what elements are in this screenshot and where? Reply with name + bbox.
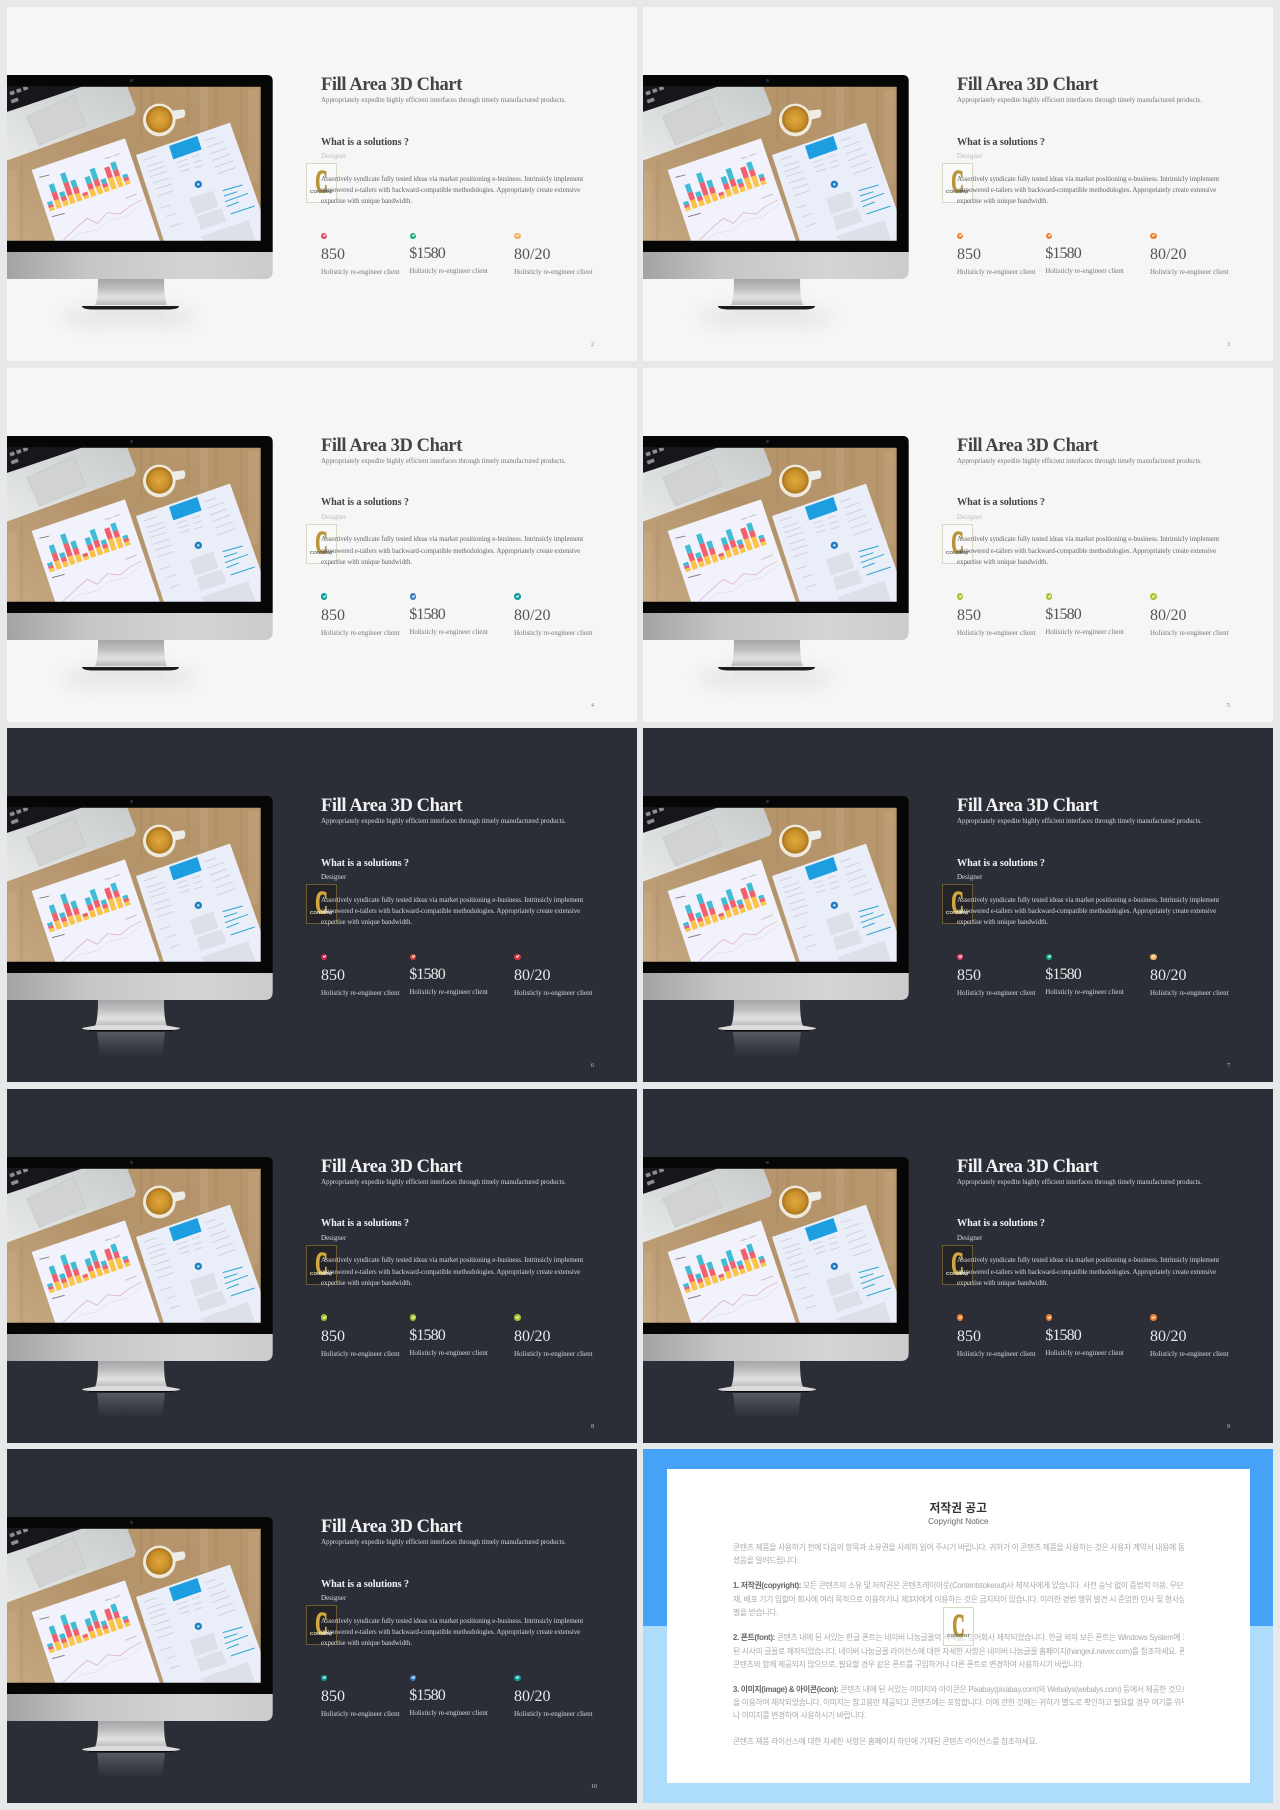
stat number 3: 80/20 xyxy=(514,1328,550,1344)
stat number 2: $1580 xyxy=(1045,966,1081,983)
icon: check 2 xyxy=(410,1314,416,1321)
heading: Fill Area 3D Chart xyxy=(321,1517,462,1537)
icon: check 1 xyxy=(321,954,327,960)
logo watermark xyxy=(306,163,337,203)
page number: 5 xyxy=(1227,702,1230,708)
stat label 1: Holisticly re-engineer client xyxy=(957,628,1036,636)
stat number 2: $1580 xyxy=(1045,606,1081,622)
stat number 3: 80/20 xyxy=(514,246,550,263)
logo watermark: CONTENT xyxy=(310,911,333,916)
monitor illustration xyxy=(643,1157,909,1412)
stat label 3: Holisticly re-engineer client xyxy=(1150,268,1229,276)
monitor illustration xyxy=(7,1517,273,1772)
logo watermark: C xyxy=(951,524,964,560)
logo watermark xyxy=(306,524,337,564)
stat label 1: Holisticly re-engineer client xyxy=(957,1350,1036,1358)
stat label 3: Holisticly re-engineer client xyxy=(514,268,593,276)
logo watermark: CONTENT xyxy=(946,911,969,916)
subtitle: Appropriately expedite highly efficient interfaces through timely manufactured products. xyxy=(321,96,566,104)
panel: slide 2 (light): expertise with unique bandwidth. xyxy=(321,197,412,205)
stat label 2: Holisticly re-engineer client xyxy=(409,1348,488,1356)
icon: check 1 xyxy=(957,954,963,960)
monitor illustration xyxy=(7,1157,273,1412)
role: Designer xyxy=(957,1234,982,1242)
question heading: What is a solutions ? xyxy=(957,136,1045,148)
logo watermark xyxy=(306,1605,337,1645)
role: Designer xyxy=(321,512,346,520)
stat number 1: 850 xyxy=(957,246,981,263)
logo watermark xyxy=(942,884,973,924)
panel: slide 2 (light): empowered e-tailers with backward-compatible methodologies. Appropriately create extensive xyxy=(321,186,580,194)
stat label 1: Holisticly re-engineer client xyxy=(321,989,400,997)
subtitle: Appropriately expedite highly efficient interfaces through timely manufactured products. xyxy=(957,456,1202,464)
panel: slide 5 (light): empowered e-tailers with backward-compatible methodologies. Appropriately create extensive xyxy=(957,546,1216,554)
logo watermark: CONTENT xyxy=(947,1634,970,1638)
stat label 2: Holisticly re-engineer client xyxy=(1045,267,1124,275)
stat number 1: 850 xyxy=(321,967,345,984)
panel: slide 3 (light): Assertively syndicate fully tested ideas via market positioning e-business. Intrinsicly implement xyxy=(957,175,1219,183)
icon: check 3 xyxy=(514,233,521,239)
heading: Fill Area 3D Chart xyxy=(957,1156,1098,1176)
icon: check 1 xyxy=(321,593,327,600)
logo watermark: CONTENT xyxy=(946,550,969,556)
page number: 7 xyxy=(1227,1063,1230,1069)
stat number 2: $1580 xyxy=(1045,245,1081,262)
stat number 3: 80/20 xyxy=(1150,967,1186,984)
panel: slide 9 (dark) xyxy=(643,1088,1273,1442)
stat label 3: Holisticly re-engineer client xyxy=(514,628,593,636)
subtitle: Appropriately expedite highly efficient interfaces through timely manufactured products. xyxy=(957,817,1202,825)
logo watermark: C xyxy=(951,163,964,199)
panel: slide 6 (dark): expertise with unique bandwidth. xyxy=(321,918,412,926)
monitor illustration xyxy=(7,436,273,688)
stat number 1: 850 xyxy=(321,1328,345,1344)
white notice card: 1. 저작권(copyright): 모든 콘텐츠의 소유 및 저작권은 콘텐츠레이아웃(Contentstokeout)사 제작사에게 있습니다. 사전 승낙 없이 증법적 이용, 무단전 xyxy=(733,1581,1184,1590)
stat label 3: Holisticly re-engineer client xyxy=(514,1350,593,1358)
panel: slide 5 (light): Assertively syndicate fully tested ideas via market positioning e-business. Intrinsicly implement xyxy=(957,535,1219,543)
panel: slide 10 (dark): Assertively syndicate fully tested ideas via market positioning e-business. Intrinsicly implement xyxy=(321,1617,583,1625)
role: Designer xyxy=(957,152,982,160)
stat label 3: Holisticly re-engineer client xyxy=(1150,628,1229,636)
panel: slide 9 (dark): empowered e-tailers with backward-compatible methodologies. Appropriately create extensive xyxy=(957,1268,1216,1276)
panel: slide 10 (dark) xyxy=(7,1449,637,1803)
closing line: 콘텐츠 제품 라이선스에 대한 자세한 사항은 홈페이지 하단에 기재된 콘텐츠 라이선스를 참조하세요. xyxy=(733,1737,1037,1746)
body text block xyxy=(321,535,584,566)
body text block xyxy=(321,1256,584,1287)
stat label 3: Holisticly re-engineer client xyxy=(514,1710,593,1718)
subtitle: Appropriately expedite highly efficient interfaces through timely manufactured products. xyxy=(321,456,566,464)
panel: slide 10 (dark): empowered e-tailers with backward-compatible methodologies. Appropriately create extensive xyxy=(321,1628,580,1636)
stat label 3: Holisticly re-engineer client xyxy=(1150,989,1229,997)
stat label 1: Holisticly re-engineer client xyxy=(321,628,400,636)
logo watermark: CONTENT xyxy=(310,190,333,195)
subtitle: Appropriately expedite highly efficient interfaces through timely manufactured products. xyxy=(957,1178,1202,1186)
subtitle: Appropriately expedite highly efficient interfaces through timely manufactured products. xyxy=(957,96,1202,104)
role: Designer xyxy=(321,152,346,160)
page number: 4 xyxy=(591,702,594,708)
stat label 1: Holisticly re-engineer client xyxy=(321,1350,400,1358)
panel: slide 8 (dark): Assertively syndicate fully tested ideas via market positioning e-business. Intrinsicly implement xyxy=(321,1256,583,1264)
role: Designer xyxy=(321,1594,346,1602)
stat label 1: Holisticly re-engineer client xyxy=(957,268,1036,276)
stat label 2: Holisticly re-engineer client xyxy=(409,628,488,636)
panel: slide 7 (dark) xyxy=(643,728,1273,1082)
panel: slide 10 (dark): expertise with unique bandwidth. xyxy=(321,1639,412,1647)
role: Designer xyxy=(957,873,982,881)
stat label 3: Holisticly re-engineer client xyxy=(514,989,593,997)
stat number 2: $1580 xyxy=(409,606,445,622)
question heading: What is a solutions ? xyxy=(321,1218,409,1229)
question heading: What is a solutions ? xyxy=(321,497,409,508)
logo watermark: CONTENT xyxy=(946,1272,969,1276)
logo watermark xyxy=(943,1606,974,1646)
panel: slide 4 (light) xyxy=(7,368,637,722)
stat number 3: 80/20 xyxy=(514,967,550,984)
panel: slide 7 (dark): expertise with unique bandwidth. xyxy=(957,918,1048,926)
stat number 3: 80/20 xyxy=(1150,606,1186,624)
stat number 1: 850 xyxy=(321,1688,345,1705)
stat label 1: Holisticly re-engineer client xyxy=(957,989,1036,997)
body text block xyxy=(957,535,1220,566)
page number: 8 xyxy=(591,1424,594,1430)
stat number 3: 80/20 xyxy=(1150,1328,1186,1344)
panel: slide 8 (dark) xyxy=(7,1088,637,1442)
icon: check 1 xyxy=(957,233,963,239)
page number: 6 xyxy=(591,1063,594,1069)
body text block xyxy=(321,896,584,926)
panel: slide 3 (light) xyxy=(643,7,1273,361)
stat label 1: Holisticly re-engineer client xyxy=(321,1710,400,1718)
body text block xyxy=(957,896,1220,926)
icon: check 2 xyxy=(1046,593,1052,600)
icon: check 1 xyxy=(321,233,327,239)
stat number 1: 850 xyxy=(321,606,345,624)
panel: slide 7 (dark): empowered e-tailers with backward-compatible methodologies. Appropriately create extensive xyxy=(957,907,1216,915)
page number: 2 xyxy=(591,342,594,348)
image and icon paragraph xyxy=(733,1685,1184,1720)
icon: check 3 xyxy=(1150,954,1157,960)
body text block xyxy=(957,175,1220,205)
question heading: What is a solutions ? xyxy=(321,858,409,868)
icon: check 1 xyxy=(321,1314,327,1321)
intro paragraph xyxy=(733,1543,1184,1564)
stat number 2: $1580 xyxy=(409,1687,445,1704)
icon: check 2 xyxy=(410,954,416,960)
stat number 1: 850 xyxy=(957,967,981,984)
icon: check 3 xyxy=(1150,233,1157,239)
panel: slide 3 (light): expertise with unique bandwidth. xyxy=(957,197,1048,205)
stat number 3: 80/20 xyxy=(514,1688,550,1705)
panel: slide 5 (light) xyxy=(643,368,1273,722)
icon: check 3 xyxy=(514,1314,521,1321)
white notice card: 2. 폰트(font): 콘텐츠 내에 된 서있는 한글 폰트는 네이버 나눔글꼴의 서체를, 영어회사 제작되었습니다. 한글 외의 보든 폰트는 Windows System에 포함 xyxy=(733,1633,1184,1642)
stat label 1: Holisticly re-engineer client xyxy=(321,268,400,276)
panel: slide 4 (light): empowered e-tailers with backward-compatible methodologies. Appropriately create extensive xyxy=(321,546,580,554)
icon: check 2 xyxy=(1046,1314,1052,1321)
heading: Fill Area 3D Chart xyxy=(321,75,462,95)
stat number 1: 850 xyxy=(321,246,345,263)
stat label 2: Holisticly re-engineer client xyxy=(1045,628,1124,636)
stat label 2: Holisticly re-engineer client xyxy=(1045,988,1124,996)
heading: Fill Area 3D Chart xyxy=(321,1156,462,1176)
white notice card: 셨음을 알려드립니다. xyxy=(733,1556,799,1564)
monitor illustration xyxy=(7,75,273,327)
panel: slide 8 (dark): expertise with unique bandwidth. xyxy=(321,1279,412,1287)
font paragraph xyxy=(733,1633,1184,1668)
panel: copyright notice xyxy=(643,1449,1273,1803)
notice title: 저작권 공고 xyxy=(929,1501,987,1515)
logo watermark: CONTENT xyxy=(310,550,333,556)
panel: slide 9 (dark): expertise with unique bandwidth. xyxy=(957,1279,1048,1287)
panel: slide 4 (light): Assertively syndicate fully tested ideas via market positioning e-business. Intrinsicly implement xyxy=(321,535,583,543)
stat number 1: 850 xyxy=(957,606,981,624)
logo watermark xyxy=(942,524,973,564)
heading: Fill Area 3D Chart xyxy=(321,796,462,816)
panel: slide 6 (dark): Assertively syndicate fully tested ideas via market positioning e-business. Intrinsicly implement xyxy=(321,896,583,904)
panel: slide 2 (light) xyxy=(7,7,637,361)
question heading: What is a solutions ? xyxy=(957,497,1045,508)
role: Designer xyxy=(957,512,982,520)
question heading: What is a solutions ? xyxy=(957,858,1045,868)
logo watermark: C xyxy=(952,1606,965,1642)
body text block xyxy=(321,175,584,205)
subtitle: Appropriately expedite highly efficient interfaces through timely manufactured products. xyxy=(321,817,566,825)
stat label 2: Holisticly re-engineer client xyxy=(409,1709,488,1717)
icon: check 1 xyxy=(957,1314,963,1321)
panel: slide 6 (dark) xyxy=(7,728,637,1082)
icon: check 2 xyxy=(410,593,416,600)
stat label 2: Holisticly re-engineer client xyxy=(1045,1348,1124,1356)
question heading: What is a solutions ? xyxy=(321,1578,409,1590)
icon: check 1 xyxy=(957,593,963,600)
white notice card xyxy=(666,1469,1250,1783)
icon: check 3 xyxy=(514,954,521,960)
panel: slide 8 (dark): empowered e-tailers with backward-compatible methodologies. Appropriately create extensive xyxy=(321,1268,580,1276)
subtitle: Appropriately expedite highly efficient interfaces through timely manufactured products. xyxy=(321,1178,566,1186)
copyright paragraph xyxy=(733,1581,1184,1616)
body text block xyxy=(321,1617,584,1647)
white notice card: 콘텐츠와 함께 제공되지 않으므로, 필요할 경우 같은 폰트를 구입하거나 다른 폰트로 변경하여 사용하시기 바랍니다. xyxy=(733,1660,1084,1668)
logo watermark: C xyxy=(951,1244,964,1280)
stat number 2: $1580 xyxy=(409,966,445,983)
body text block xyxy=(957,1256,1220,1287)
white notice card: 나 이미지를 변경하여 사용하시기 바랍니다. xyxy=(733,1711,866,1720)
panel: slide 2 (light): Assertively syndicate fully tested ideas via market positioning e-business. Intrinsicly implement xyxy=(321,175,583,183)
heading: Fill Area 3D Chart xyxy=(957,796,1098,816)
icon: check 2 xyxy=(1046,233,1052,239)
stat number 2: $1580 xyxy=(409,1326,445,1344)
heading: Fill Area 3D Chart xyxy=(957,75,1098,95)
heading: Fill Area 3D Chart xyxy=(321,436,462,456)
logo watermark: C xyxy=(315,884,328,920)
stat label 2: Holisticly re-engineer client xyxy=(409,988,488,996)
stat number 2: $1580 xyxy=(409,245,445,262)
panel: slide 7 (dark): Assertively syndicate fully tested ideas via market positioning e-business. Intrinsicly implement xyxy=(957,896,1219,904)
stat number 1: 850 xyxy=(957,1328,981,1344)
logo watermark xyxy=(942,163,973,203)
logo watermark: C xyxy=(315,163,328,199)
logo watermark: C xyxy=(315,1605,328,1641)
icon: check 2 xyxy=(410,233,416,239)
logo watermark xyxy=(306,884,337,924)
logo watermark: C xyxy=(315,524,328,560)
role: Designer xyxy=(321,873,346,881)
stat number 3: 80/20 xyxy=(514,606,550,624)
logo watermark: C xyxy=(951,884,964,920)
stat number 2: $1580 xyxy=(1045,1326,1081,1344)
logo watermark: CONTENT xyxy=(946,190,969,195)
page number: 9 xyxy=(1227,1424,1230,1430)
panel: slide 6 (dark): empowered e-tailers with backward-compatible methodologies. Appropriately create extensive xyxy=(321,907,580,915)
monitor illustration xyxy=(7,796,273,1052)
panel: slide 3 (light): empowered e-tailers with backward-compatible methodologies. Appropriately create extensive xyxy=(957,186,1216,194)
logo watermark: CONTENT xyxy=(310,1632,333,1637)
icon: check 1 xyxy=(321,1675,327,1681)
stat number 3: 80/20 xyxy=(1150,246,1186,263)
logo watermark: C xyxy=(315,1244,328,1280)
panel: slide 4 (light): expertise with unique bandwidth. xyxy=(321,558,412,566)
icon: check 2 xyxy=(410,1675,416,1681)
heading: Fill Area 3D Chart xyxy=(957,436,1098,456)
icon: check 3 xyxy=(1150,1314,1157,1321)
subtitle: Appropriately expedite highly efficient interfaces through timely manufactured products. xyxy=(321,1538,566,1546)
monitor illustration xyxy=(643,796,909,1052)
question heading: What is a solutions ? xyxy=(957,1218,1045,1229)
panel: slide 9 (dark): Assertively syndicate fully tested ideas via market positioning e-business. Intrinsicly implement xyxy=(957,1256,1219,1264)
notice subtitle: Copyright Notice xyxy=(928,1517,989,1526)
page number: 10 xyxy=(591,1784,597,1790)
icon: check 2 xyxy=(1046,954,1052,960)
monitor illustration xyxy=(643,75,909,327)
question heading: What is a solutions ? xyxy=(321,136,409,148)
logo watermark xyxy=(306,1244,337,1284)
logo watermark: CONTENT xyxy=(310,1272,333,1276)
role: Designer xyxy=(321,1234,346,1242)
stat label 3: Holisticly re-engineer client xyxy=(1150,1350,1229,1358)
panel: slide 5 (light): expertise with unique bandwidth. xyxy=(957,558,1048,566)
logo watermark xyxy=(942,1244,973,1284)
icon: check 3 xyxy=(1150,593,1157,600)
stat label 2: Holisticly re-engineer client xyxy=(409,267,488,275)
page number: 3 xyxy=(1227,342,1230,348)
icon: check 3 xyxy=(514,593,521,600)
monitor illustration xyxy=(643,436,909,688)
white notice card: 벌을 받습니다. xyxy=(733,1608,778,1616)
icon: check 3 xyxy=(514,1675,521,1681)
